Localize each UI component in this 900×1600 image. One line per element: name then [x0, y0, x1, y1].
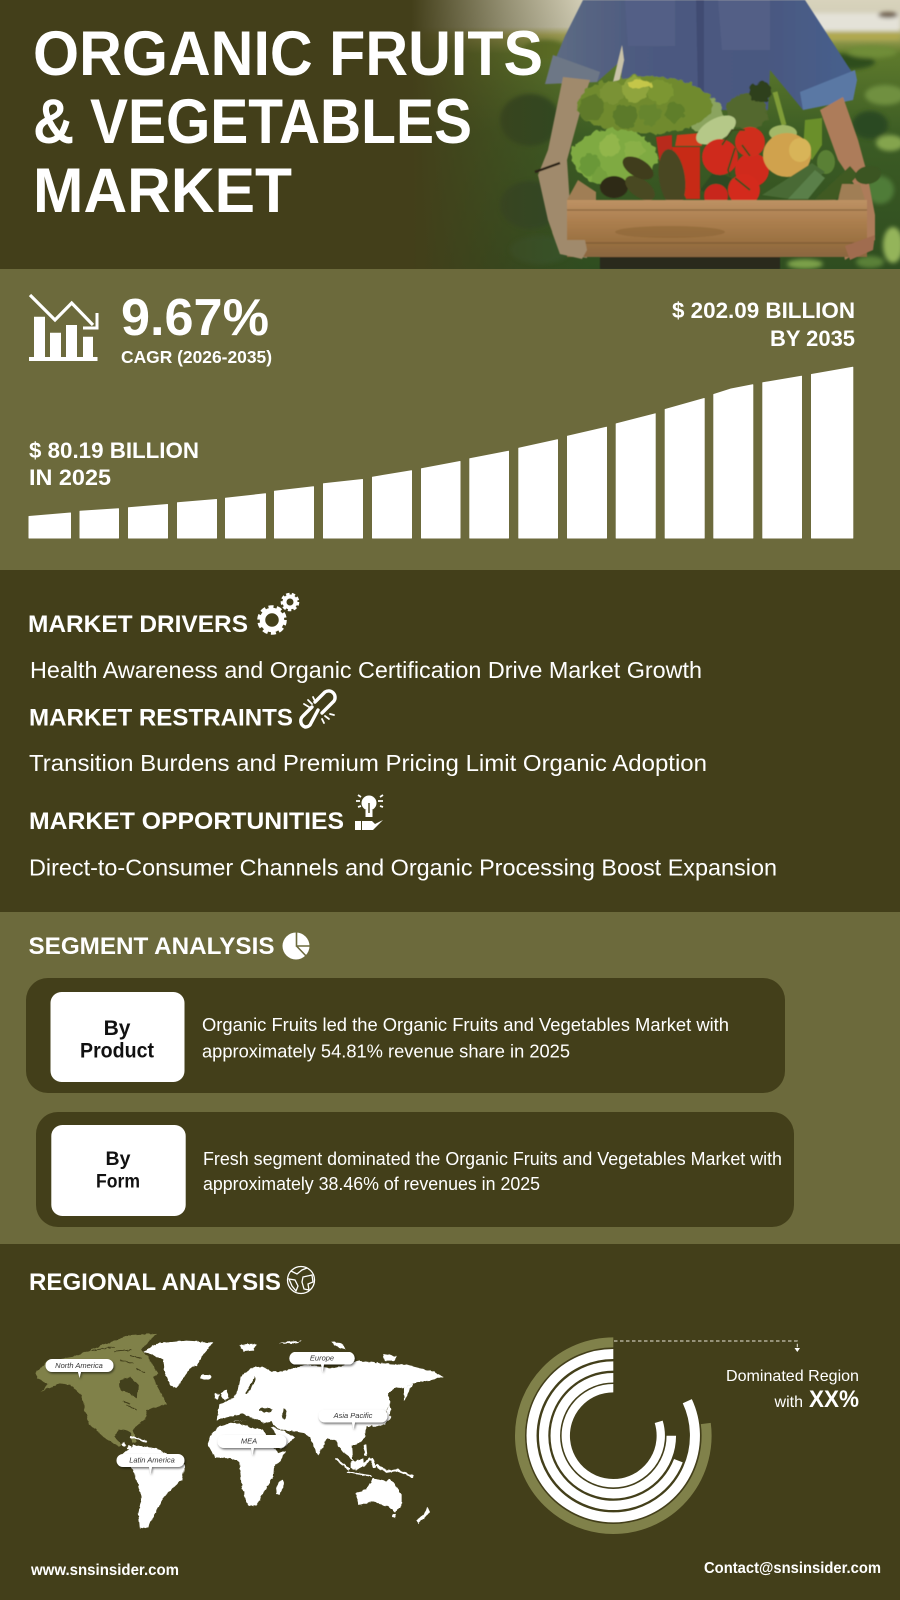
callout: Latin America — [117, 1454, 185, 1474]
heading: segment analysis: SEGMENT ANALYSIS — [28, 933, 274, 960]
yellow tomato — [763, 133, 811, 177]
chart: radial bars — [520, 1342, 707, 1529]
title: MARKET — [33, 156, 292, 226]
right arm — [820, 97, 875, 260]
panel: header background — [0, 0, 900, 269]
label box: by form: By — [106, 1148, 131, 1170]
shirt — [545, 0, 857, 110]
crate — [567, 180, 865, 200]
map: world — [35, 1333, 443, 1529]
label box: by form — [51, 1125, 186, 1216]
callout: Europe: Europe — [310, 1354, 334, 1362]
photo: farmer holding crate of vegetables — [380, 0, 900, 269]
panel: market size and CAGR — [0, 269, 900, 570]
2025 value: IN 2025 — [29, 465, 111, 490]
callout: MEA — [218, 1435, 286, 1455]
dashed leader arrow — [614, 1341, 800, 1352]
panel: regional analysis — [0, 1244, 900, 1600]
panel: segment analysis — [0, 912, 900, 1244]
callout: Asia Pacific: Asia Pacific — [333, 1411, 373, 1420]
legs shadow — [600, 256, 780, 269]
label box: by product: Product — [80, 1040, 154, 1062]
icon: light bulb over hand — [355, 795, 383, 830]
text: driver: Health Awareness and Organic Certification Drive Market Growth — [30, 657, 702, 683]
label box: by product — [50, 992, 184, 1082]
text: by product: approximately 54.81% revenue share in 2025 — [202, 1042, 570, 1062]
callout: Europe — [289, 1352, 355, 1372]
title — [33, 19, 543, 226]
label box: by product: By — [104, 1017, 131, 1040]
text: by product: Organic Fruits led the Organic Fruits and Vegetables Market with — [202, 1015, 729, 1035]
footer: website: www.snsinsider.com — [30, 1562, 179, 1579]
tomatoes — [695, 114, 736, 146]
card: by product — [26, 978, 785, 1093]
2035 value: BY 2035 — [770, 326, 855, 351]
big lettuce — [577, 76, 723, 134]
text: by form: approximately 38.46% of revenues in 2025 — [203, 1174, 540, 1194]
text: by form: Fresh segment dominated the Organic Fruits and Vegetables Market with — [203, 1149, 782, 1169]
card: by form — [36, 1112, 794, 1227]
heading: market drivers: MARKET DRIVERS — [28, 611, 248, 638]
lower lettuce — [572, 129, 656, 185]
map: Greenland, Central America islands and South America — [120, 1341, 213, 1529]
callout: North America — [46, 1359, 114, 1378]
zucchini — [762, 163, 825, 199]
CAGR label: CAGR (2026-2035) — [121, 347, 272, 367]
map: Eurasia, Africa and Oceania — [207, 1341, 443, 1523]
2035 value — [672, 298, 855, 351]
red peppers — [672, 147, 700, 199]
callout: Asia Pacific — [318, 1410, 388, 1429]
icon: globe — [288, 1266, 314, 1294]
text: dominated region: XX% — [809, 1386, 859, 1413]
2025 value — [29, 438, 199, 490]
heading: regional analysis: REGIONAL ANALYSIS — [29, 1269, 281, 1296]
broccoli and greens — [726, 82, 772, 130]
title: & VEGETABLES — [33, 87, 472, 157]
label box: by form: Form — [96, 1170, 140, 1192]
footer: contact: Contact@snsinsider.com — [704, 1560, 881, 1577]
panel: market dynamics — [0, 570, 900, 912]
dark cucumbers — [600, 176, 628, 198]
icon: gears — [259, 594, 298, 633]
title: ORGANIC FRUITS — [33, 19, 543, 89]
CAGR value: 9.67% — [121, 289, 269, 347]
callout: North America: North America — [55, 1361, 103, 1370]
icon: pie chart — [282, 931, 311, 960]
2035 value: $ 202.09 BILLION — [672, 298, 855, 323]
text: restraint: Transition Burdens and Premium Pricing Limit Organic Adoption — [29, 750, 707, 776]
hands — [552, 232, 587, 259]
text: dominated region: Dominated Region — [726, 1368, 859, 1385]
bar chart: market growth — [29, 367, 853, 538]
callout: MEA: MEA — [241, 1436, 257, 1446]
heading: market restraints: MARKET RESTRAINTS — [29, 704, 293, 732]
text: dominated region: with — [774, 1394, 803, 1411]
left arm — [538, 77, 590, 258]
text: dominated region — [726, 1368, 859, 1413]
text: by form — [203, 1149, 782, 1194]
text: by product — [202, 1015, 729, 1062]
2025 value: $ 80.19 BILLION — [29, 438, 199, 463]
heading: market opportunities: MARKET OPPORTUNITIES — [29, 808, 344, 835]
icon: broken link — [301, 691, 335, 727]
text: opportunity: Direct-to-Consumer Channels and Organic Processing Boost Expansion — [29, 854, 777, 880]
map region: North America highlighted — [35, 1333, 167, 1447]
icon: bar chart with trend arrow — [29, 295, 98, 361]
callout: Latin America: Latin America — [129, 1456, 175, 1464]
